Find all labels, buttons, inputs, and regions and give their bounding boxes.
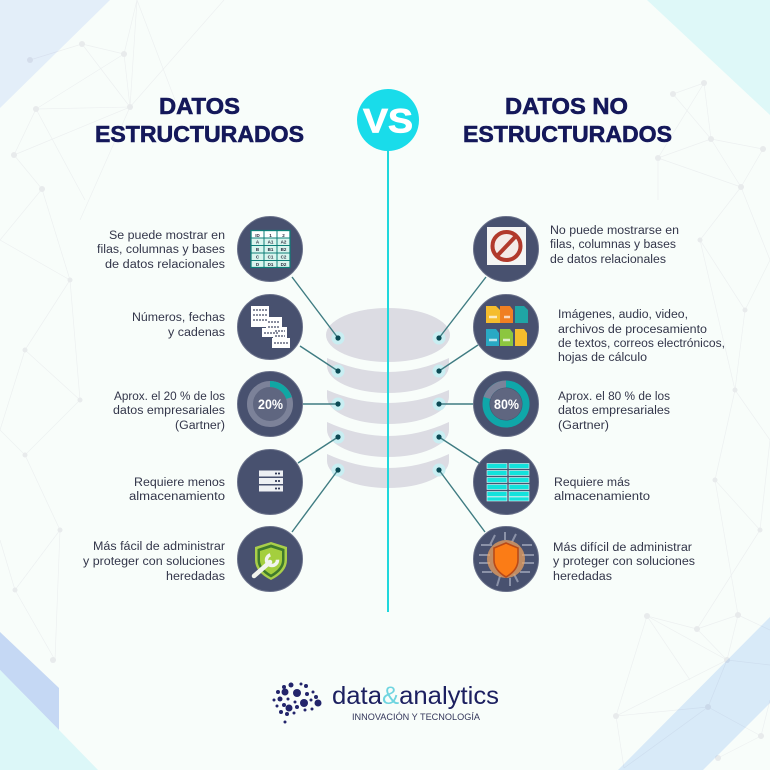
panel: structured data items — [83, 216, 302, 592]
text: easier to manage: y proteger con soluciones — [83, 556, 225, 568]
icon: 20 percent donut: 20% — [258, 396, 283, 412]
icon: data table: 2 — [282, 233, 285, 238]
icon: green shield with wrench — [238, 526, 302, 592]
leader lines and connection dots — [292, 277, 486, 532]
icon: data table: C1 — [268, 254, 274, 260]
text: 20 percent: datos empresariales — [113, 405, 225, 417]
icon: prohibited table — [474, 216, 538, 282]
text: easier to manage — [83, 541, 225, 583]
icon: data table: B1 — [268, 247, 274, 252]
vs badge — [357, 89, 419, 151]
text: 20 percent: Aprox. el 20 % de los — [114, 391, 225, 403]
heading: datos no estructurados: ESTRUCTURADOS — [463, 121, 672, 147]
vs badge: VS — [363, 102, 413, 140]
text: cannot be relational: No puede mostrarse en — [550, 225, 679, 237]
text: more storage — [554, 477, 650, 503]
text: less storage: Requiere menos — [134, 477, 225, 489]
text: 80 percent: datos empresariales — [558, 405, 670, 417]
icon: 80 percent donut: 80% — [494, 396, 519, 412]
text: cannot be relational: filas, columnas y bases — [550, 239, 676, 251]
centre divider line — [387, 148, 389, 612]
icon: orange shield with circuit — [474, 526, 538, 592]
text: relational display: filas, columnas y bases — [97, 244, 225, 256]
icon: data table: C — [256, 254, 260, 260]
text: harder to manage: Más difícil de administrar — [553, 542, 692, 554]
heading: datos no estructurados — [463, 93, 672, 147]
icon: data table — [238, 216, 302, 282]
icon: data table: C2 — [281, 254, 287, 260]
icon: data table: D — [256, 262, 260, 267]
text: easier to manage: Más fácil de administrar — [93, 541, 225, 553]
text: harder to manage: heredadas — [553, 571, 612, 583]
icon: data table: B — [256, 247, 260, 252]
text: cannot be relational: de datos relacionales — [550, 254, 666, 266]
icon: documents with values — [238, 294, 302, 360]
text: numbers and dates: y cadenas — [168, 327, 225, 339]
heading: datos estructurados: DATOS — [159, 93, 240, 119]
text: harder to manage — [553, 542, 695, 583]
text: images audio video — [558, 309, 725, 364]
heading: datos estructurados — [95, 93, 304, 147]
text: cannot be relational — [550, 225, 679, 266]
icon: server stack — [238, 450, 302, 514]
text: easier to manage: heredadas — [166, 571, 225, 583]
heading: datos no estructurados: DATOS NO — [505, 93, 628, 119]
icon: large server racks — [474, 450, 538, 514]
icon: data table: A — [256, 240, 260, 244]
icon: coloured file types — [474, 294, 538, 360]
text: images audio video: de textos, correos electrónicos, — [558, 338, 725, 350]
icon: data table: ID — [255, 233, 261, 238]
text: images audio video: Imágenes, audio, video, — [558, 309, 688, 321]
icon: data table: 1 — [269, 233, 272, 238]
text: less storage — [129, 477, 225, 503]
icon: 20 percent donut — [238, 372, 302, 436]
text: relational display: de datos relacionales — [105, 259, 225, 271]
text: more storage: almacenamiento — [554, 491, 650, 503]
tagline: INNOVACIÓN Y TECNOLOGÍA — [352, 712, 481, 723]
panel: unstructured data items — [474, 216, 725, 592]
text: 20 percent: (Gartner) — [175, 420, 225, 432]
text: 80 percent — [558, 391, 670, 432]
text: harder to manage: y proteger con soluciones — [553, 556, 695, 568]
text: images audio video: archivos de procesamiento — [558, 324, 707, 336]
text: less storage: almacenamiento — [129, 491, 225, 503]
text: 80 percent: (Gartner) — [558, 420, 609, 432]
icon: brain of dots — [272, 682, 322, 724]
icon: data table: D1 — [268, 262, 274, 267]
icon: data table: A2 — [281, 240, 287, 244]
text: numbers and dates — [132, 312, 225, 339]
text: relational display — [97, 230, 225, 271]
wordmark: data&analytics — [332, 682, 499, 710]
icon: data table: B2 — [281, 247, 287, 252]
logo: data and analytics — [272, 682, 499, 724]
icon: data table: D2 — [281, 262, 287, 267]
text: 80 percent: Aprox. el 80 % de los — [558, 391, 670, 403]
text: 20 percent — [113, 391, 225, 432]
text: more storage: Requiere más — [554, 477, 630, 489]
text: relational display: Se puede mostrar en — [109, 230, 225, 242]
heading: datos estructurados: ESTRUCTURADOS — [95, 121, 304, 147]
text: images audio video: hojas de cálculo — [558, 352, 647, 364]
icon: data table: A1 — [268, 240, 274, 244]
database cylinder — [326, 308, 450, 488]
text: numbers and dates: Números, fechas — [132, 312, 225, 324]
icon: 80 percent donut — [474, 372, 538, 436]
